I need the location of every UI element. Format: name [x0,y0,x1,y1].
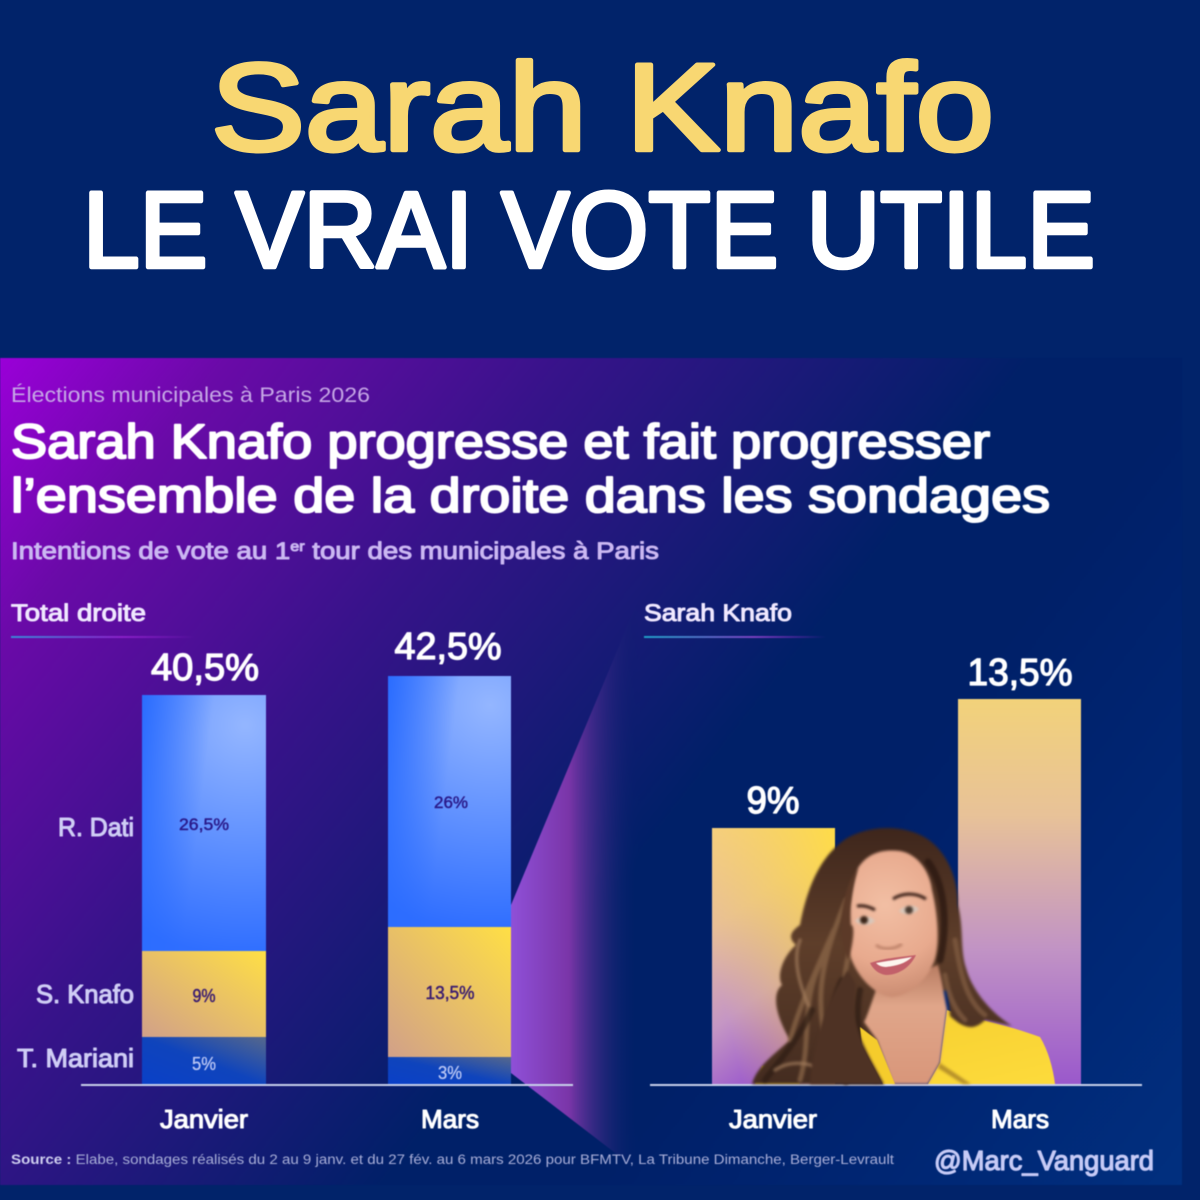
left axis and months: Mars [421,1104,479,1134]
bar chart: sarah knafo: 13,5% [968,652,1072,694]
stacked bar: janvier [142,647,266,1085]
left axis and months [81,1084,573,1134]
stacked bar: janvier: 9% [192,986,216,1006]
face [848,850,938,997]
row labels: S. Knafo [36,979,134,1009]
panel heading: tour des municipales à Paris [305,538,659,565]
panel heading: Sarah Knafo progresse et fait progresser [11,416,990,469]
neck and chest [864,965,947,1084]
front hair lock [841,868,858,960]
panel heading: l’ensemble de la droite dans les sondages [11,470,1050,523]
stacked bar: mars: 3% [438,1063,462,1083]
bar chart: sarah knafo [650,652,1142,1134]
panel heading: er [290,538,305,554]
section header: total droite: Total droite [11,600,146,627]
hair over left shoulder [810,970,884,1084]
eyes and brows [855,894,926,925]
stacked bar: mars: 26% [434,793,468,812]
title: LE VRAI VOTE UTILE [83,169,1095,290]
jacket left collar [860,1027,895,1084]
stacked bar: janvier: 5% [192,1054,216,1074]
hair mass [752,828,1012,1084]
stacked bar: mars [388,626,511,1085]
section header: sarah knafo: Sarah Knafo [644,600,792,627]
panel heading: Élections municipales à Paris 2026 [11,384,370,407]
bar chart: sarah knafo: Janvier [729,1104,817,1134]
row labels [17,812,134,1073]
row labels: R. Dati [58,812,134,842]
hair strands [765,862,985,1082]
source note: Source : Elabe, sondages réalisés du 2 au 9 janv. et du 27 fév. au 6 mars 2026 pour BFMTV, La Tribune Dimanche, Berger-Levrault [11,1152,894,1167]
panel: poll chart [0,358,1182,1185]
funnel connector [511,596,640,1172]
bar chart: sarah knafo: Mars [991,1104,1049,1134]
bar chart: sarah knafo: 9% [746,780,800,822]
row labels: T. Mariani [17,1043,134,1073]
jacket lapel [938,1063,971,1084]
panel heading [11,384,1050,565]
left axis and months: Janvier [160,1104,248,1134]
nose [876,944,902,949]
title: Sarah Knafo [211,39,994,177]
portrait of sarah knafo [752,828,1055,1084]
author handle: @Marc_Vanguard [934,1145,1154,1176]
jacket [755,1010,1055,1084]
stacked bar: janvier: 26,5% [179,815,229,834]
mouth [870,955,916,975]
panel heading: Intentions de vote au 1 [11,538,254,565]
title [83,39,1095,290]
stacked bar: janvier: 40,5% [151,647,259,689]
stacked bar: mars: 42,5% [394,626,502,668]
stacked bar: mars: 13,5% [426,983,474,1003]
